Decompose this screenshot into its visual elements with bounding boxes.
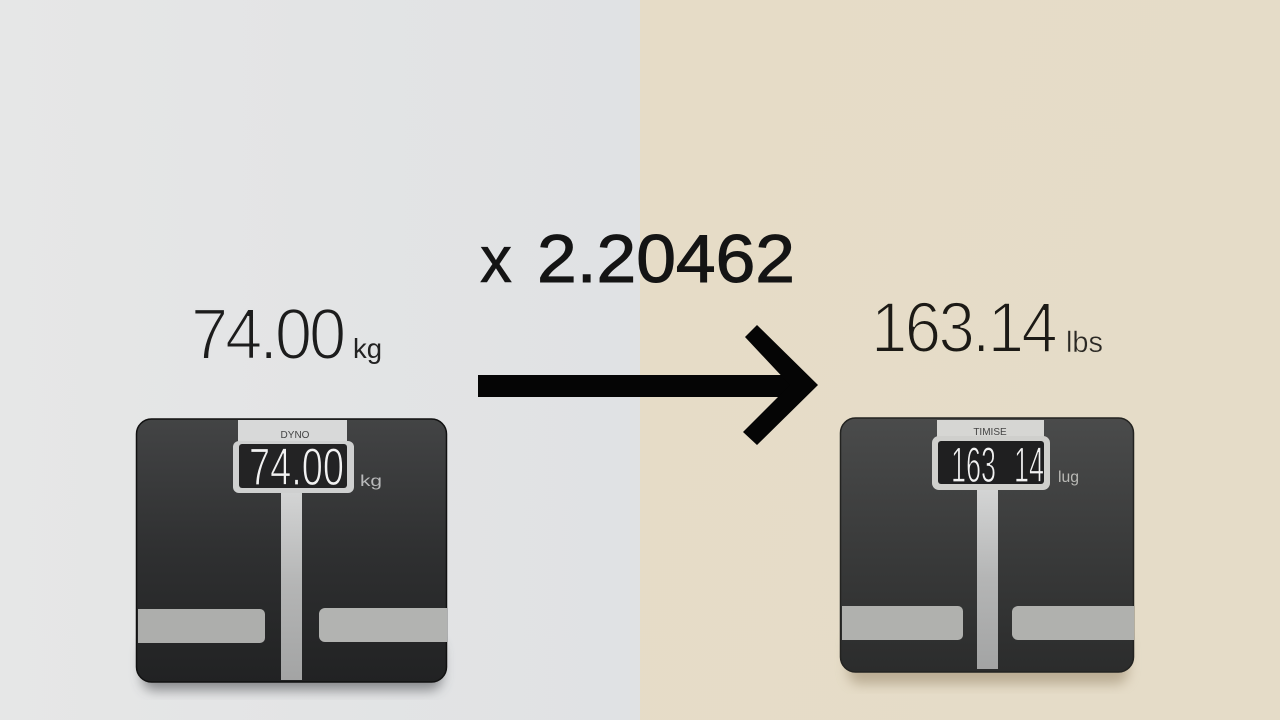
right display: 163	[951, 437, 996, 493]
right foot pad	[319, 608, 447, 642]
conversion factor: 2.20462	[537, 221, 795, 297]
left display: 74.00	[249, 438, 344, 497]
left foot pad	[138, 609, 265, 643]
right scale top tab	[937, 420, 1044, 442]
right stem	[977, 488, 998, 669]
left stem	[281, 490, 302, 680]
right brand label: TIMISE	[973, 427, 1007, 438]
right display	[932, 436, 1050, 493]
arrow	[478, 325, 818, 445]
left scale top tab	[238, 420, 347, 444]
left scale body	[136, 419, 446, 682]
right scale	[840, 418, 1134, 684]
kilogram value: kg	[353, 333, 382, 364]
kilogram value: 74.00	[191, 294, 346, 375]
pound value: lbs	[1066, 326, 1103, 359]
right display unit: lug	[1058, 469, 1079, 486]
conversion factor: x	[480, 222, 512, 296]
right right foot pad	[1012, 606, 1134, 640]
right display: 14	[1014, 437, 1044, 493]
pound value: 163.14	[871, 289, 1058, 368]
background: right panel	[640, 0, 1280, 720]
right scale body	[840, 418, 1134, 672]
left scale	[136, 419, 447, 690]
background: left panel	[0, 0, 640, 720]
left scale shadow	[142, 640, 442, 690]
right left foot pad	[842, 606, 963, 640]
left brand label: DYNO	[281, 430, 310, 441]
left display unit: kg	[360, 473, 382, 490]
right scale shadow	[848, 634, 1128, 684]
